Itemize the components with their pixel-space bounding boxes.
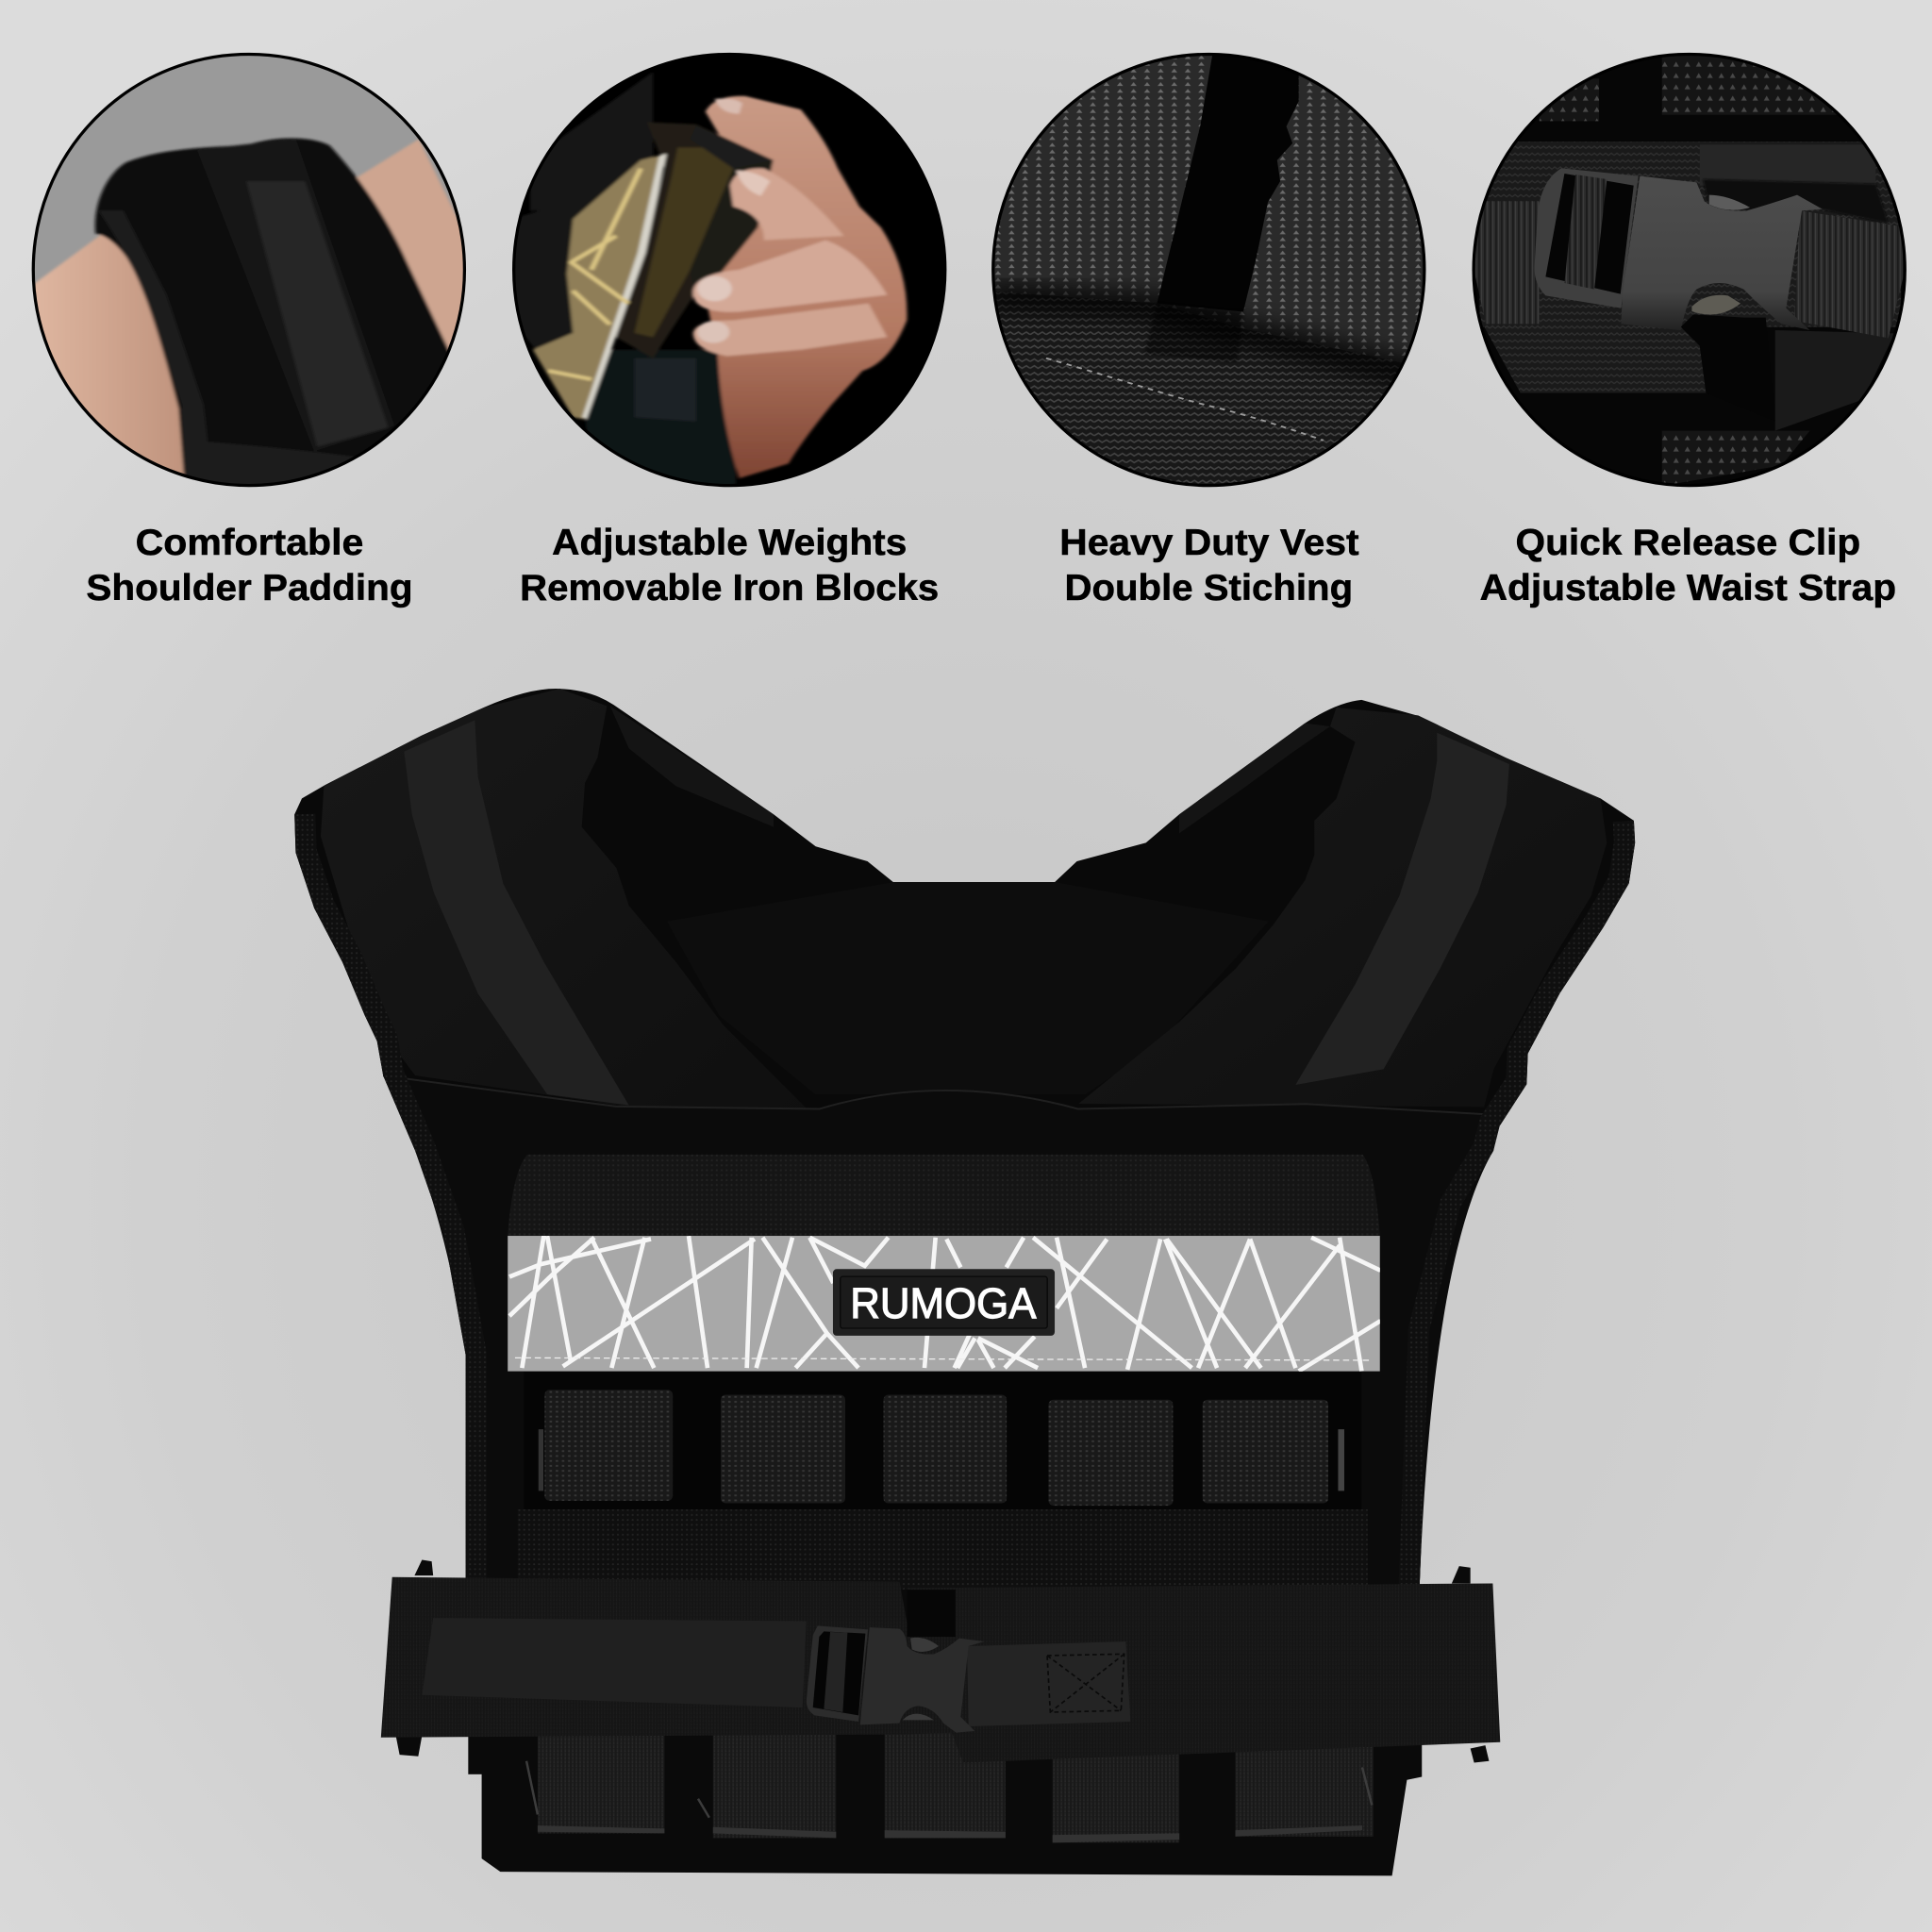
panel: shoulder padding photo bbox=[34, 56, 463, 484]
caption: quick release clip bbox=[1480, 523, 1896, 608]
flap top bbox=[508, 1155, 1380, 1236]
vest upper silhouette bbox=[294, 689, 1635, 1590]
buckle and right strap bbox=[807, 1625, 1130, 1733]
caption: heavy duty vest bbox=[1059, 523, 1359, 608]
right shoulder strap bbox=[1295, 733, 1509, 1085]
lower pocket straps bbox=[538, 1729, 664, 1833]
gold reflective panel bbox=[533, 154, 667, 419]
caption: quick release clip: Quick Release Clip bbox=[1516, 523, 1860, 563]
weighted vest product bbox=[294, 689, 1635, 1875]
belt left bbox=[381, 1577, 907, 1738]
pocket strap lips bbox=[538, 1825, 1362, 1842]
reflective grey panel bbox=[508, 1234, 1380, 1372]
logo badge bbox=[833, 1269, 1055, 1336]
chest panel below seam bbox=[383, 1075, 1500, 1590]
right shoulder pad bbox=[1078, 708, 1607, 1107]
circle outline: quick release clip bbox=[1474, 54, 1905, 486]
left strap bbox=[1474, 201, 1540, 324]
caption: comfortable shoulder padding: Shoulder Padding bbox=[86, 568, 413, 608]
buckle body bbox=[860, 1627, 984, 1733]
caption: adjustable weights bbox=[520, 523, 939, 608]
panel: heavy duty stitching photo bbox=[994, 56, 1423, 484]
waist belt and lower pockets bbox=[381, 1559, 1500, 1875]
left webbing strap bbox=[422, 1618, 807, 1707]
iron block bbox=[616, 123, 774, 358]
icon: buckle body bbox=[1621, 176, 1823, 330]
right collar strip bbox=[1179, 724, 1330, 833]
caption: comfortable shoulder padding: Comfortable bbox=[136, 523, 363, 563]
box stitch bbox=[1047, 1654, 1124, 1712]
logo text: RUMOGA bbox=[850, 1279, 1037, 1327]
neck back panel bbox=[667, 882, 1269, 1094]
iron edges bbox=[526, 1761, 1372, 1818]
lower body bbox=[482, 1729, 1422, 1875]
right webbing strap bbox=[967, 1641, 1130, 1726]
belt ring tabs bbox=[396, 1559, 1489, 1762]
middle pocket bbox=[518, 1509, 1368, 1590]
circle outline: heavy duty stitching bbox=[993, 54, 1424, 486]
panel: quick release clip photo bbox=[1475, 56, 1904, 484]
caption: adjustable weights: Adjustable Weights bbox=[552, 523, 907, 563]
left shoulder strap bbox=[404, 720, 629, 1106]
buckle frame bbox=[807, 1625, 868, 1722]
chest seam bbox=[383, 1075, 1500, 1115]
lower body behind belt bbox=[468, 1565, 1417, 1774]
icon: hand bbox=[696, 96, 907, 478]
panel: adjustable weights photo bbox=[506, 49, 955, 492]
left collar strip bbox=[610, 706, 774, 827]
caption: heavy duty vest: Heavy Duty Vest bbox=[1059, 523, 1359, 563]
fingers bbox=[730, 168, 844, 241]
caption: adjustable weights: Removable Iron Blocks bbox=[520, 568, 939, 608]
left shoulder pad bbox=[321, 689, 818, 1120]
icon: buckle frame bbox=[1535, 168, 1639, 308]
belt right bbox=[907, 1583, 1500, 1762]
side mesh trim bbox=[294, 814, 1635, 1590]
right strap bbox=[1794, 210, 1906, 338]
circle outline: adjustable weights bbox=[514, 54, 945, 486]
caption: heavy duty vest: Double Stiching bbox=[1064, 568, 1353, 608]
caption: comfortable shoulder padding bbox=[86, 523, 413, 608]
upper pocket straps bbox=[524, 1372, 1361, 1509]
caption: quick release clip: Adjustable Waist Strap bbox=[1480, 568, 1896, 608]
circle outline: shoulder padding bbox=[33, 54, 464, 486]
